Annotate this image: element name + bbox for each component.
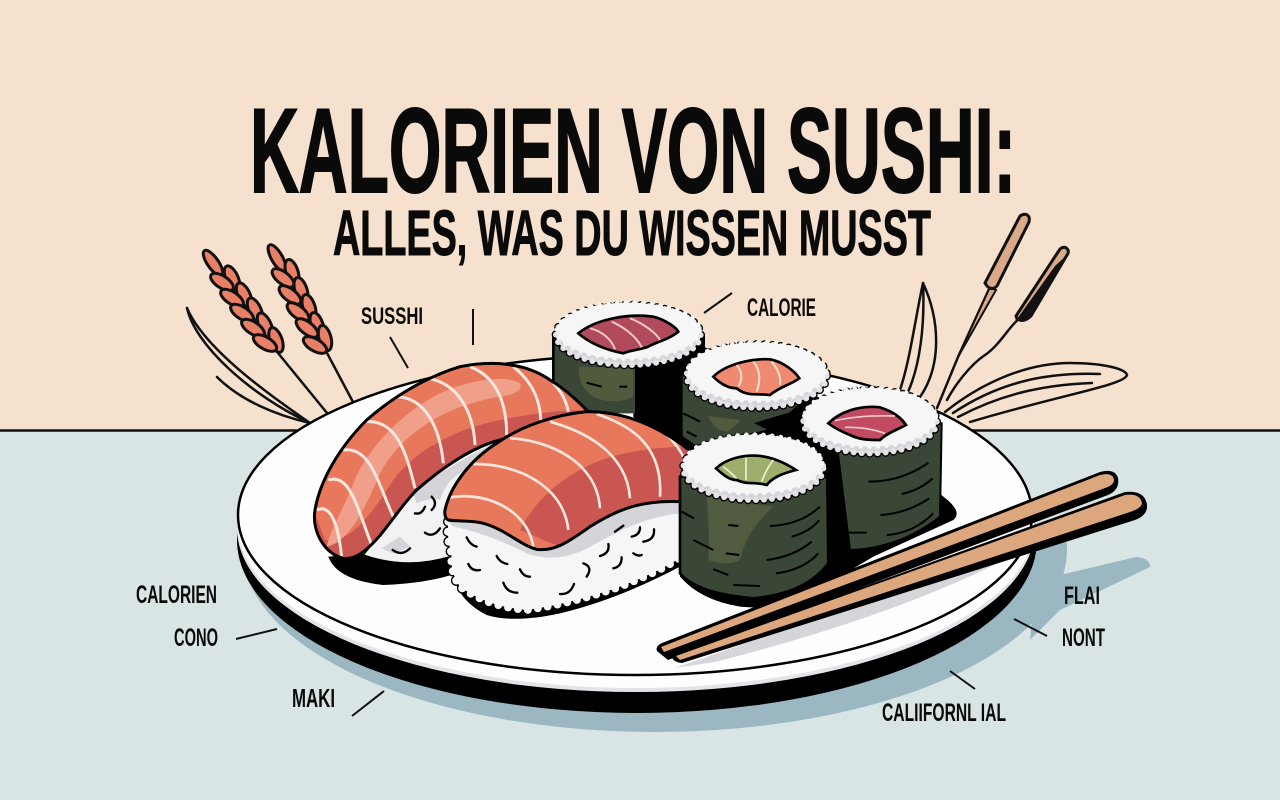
label: Nont: NONT — [1062, 624, 1105, 652]
label: Susshi — [361, 303, 473, 368]
label: Californl Ial: CALIIFORNL IAL — [882, 699, 1006, 727]
plate — [237, 355, 1150, 732]
label: Calorie — [704, 293, 816, 322]
label: Calorien: CALORIEN — [136, 581, 217, 609]
icon: left wheat and grass — [187, 242, 353, 423]
roll: tuna back — [553, 303, 705, 435]
label: Maki: MAKI — [292, 683, 335, 713]
rolls: back group — [553, 303, 957, 607]
label: Nont — [1014, 619, 1105, 652]
label: Maki — [292, 683, 384, 716]
roll: tuna right — [803, 388, 942, 550]
icon: right reeds and leaves — [900, 214, 1127, 422]
label: Californl Ial — [882, 671, 1006, 727]
plate shadow — [250, 542, 1150, 732]
roll: cucumber front — [680, 435, 828, 598]
background: table — [0, 430, 1280, 800]
nigiri: back salmon — [312, 362, 589, 585]
label: Susshi: SUSSHI — [361, 303, 423, 330]
nigiri: front salmon — [442, 410, 688, 619]
nigiri: back and front salmon — [312, 362, 688, 619]
background: wall — [0, 0, 1280, 430]
label: Cono: CONO — [174, 624, 218, 652]
roll: salmon middle — [682, 342, 830, 447]
chopsticks — [657, 471, 1147, 663]
label: Flai: FLAI — [1064, 582, 1100, 610]
label: Calorie: CALORIE — [747, 294, 816, 322]
